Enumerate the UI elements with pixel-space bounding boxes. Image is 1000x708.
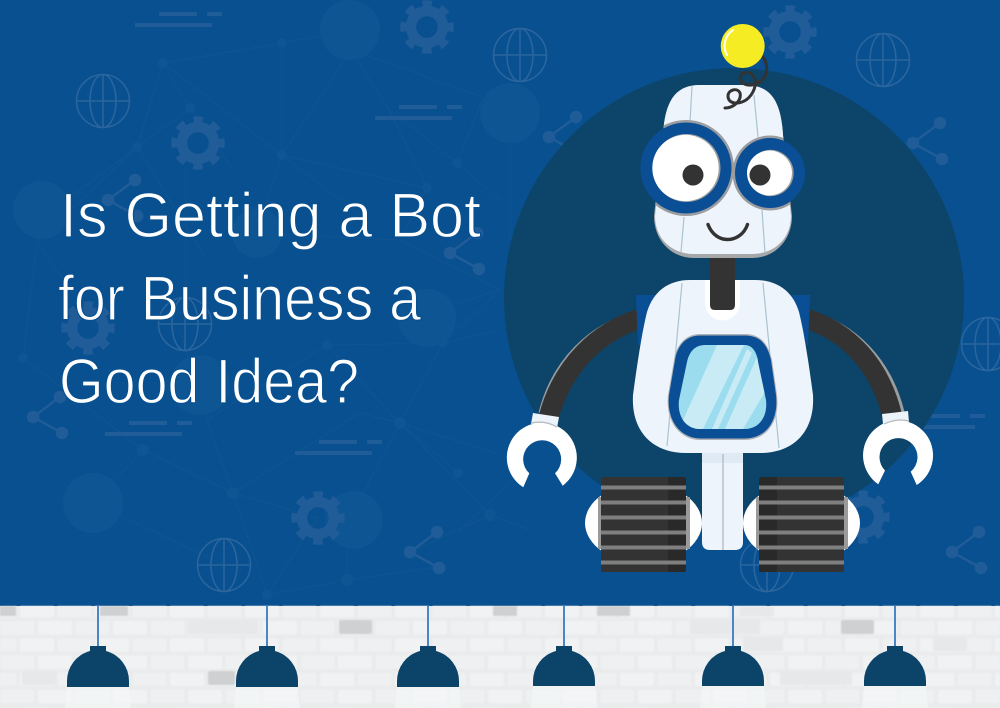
faint dash lines bbox=[105, 12, 985, 455]
leg bbox=[702, 448, 743, 550]
neck collar bbox=[705, 280, 740, 320]
antenna bulb bbox=[721, 24, 765, 68]
torso bbox=[633, 280, 813, 453]
lamp 5 bbox=[700, 606, 766, 708]
faint circles bbox=[13, 0, 540, 600]
lamp 2 bbox=[234, 606, 300, 708]
lamp 3 bbox=[395, 606, 461, 708]
antenna spring bbox=[725, 57, 767, 108]
darker bricks bbox=[0, 606, 874, 685]
title: Good Idea? bbox=[59, 347, 359, 417]
faint globes bbox=[76, 28, 1000, 592]
right claw bbox=[863, 411, 933, 485]
title: for Business a bbox=[58, 264, 422, 334]
faint gears bbox=[64, 4, 886, 542]
chest screen bbox=[668, 334, 777, 440]
title: Is Getting a Bot bbox=[60, 181, 481, 251]
faint share icons bbox=[27, 111, 987, 574]
robot bbox=[507, 24, 933, 572]
title bbox=[58, 181, 481, 417]
neck bbox=[710, 257, 735, 310]
lamp 4 bbox=[531, 606, 597, 708]
muted bricks bbox=[22, 607, 967, 685]
dark circle behind robot bbox=[504, 68, 964, 528]
lamp 6 bbox=[862, 606, 928, 708]
left claw bbox=[507, 413, 577, 487]
smile bbox=[708, 224, 748, 240]
left arm bbox=[540, 312, 639, 416]
left wheel bbox=[585, 477, 702, 572]
brick wall bbox=[0, 606, 1000, 708]
left eye bbox=[638, 120, 734, 216]
shoulders bbox=[636, 295, 810, 345]
right eye bbox=[732, 136, 808, 210]
lamp 1 bbox=[65, 606, 131, 708]
right wheel bbox=[743, 477, 860, 572]
head bbox=[638, 85, 808, 258]
right arm bbox=[807, 312, 903, 416]
hanging lamps bbox=[65, 606, 928, 708]
